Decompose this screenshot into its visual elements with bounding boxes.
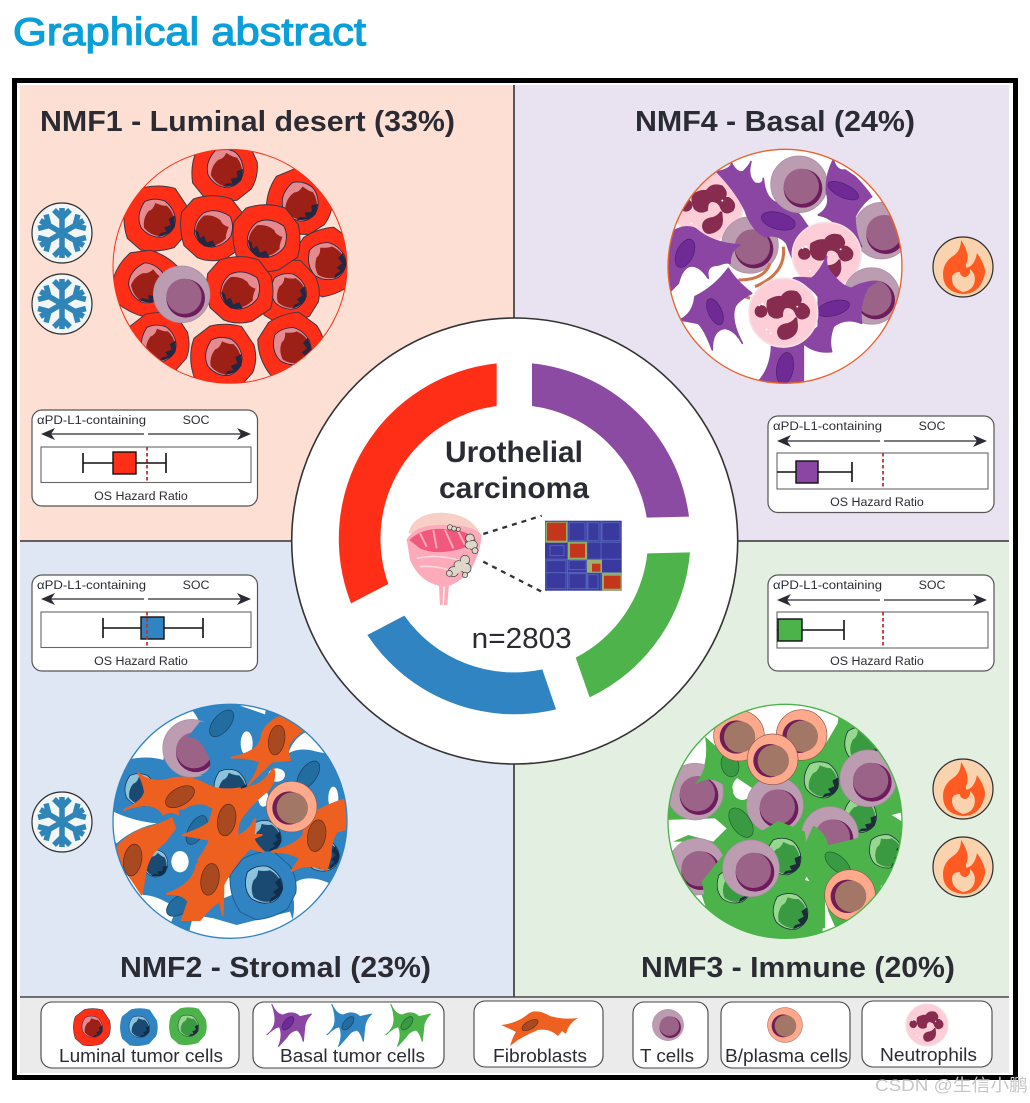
tumor microenvironment circle: NMF4 [668, 149, 910, 386]
title: Graphical abstract [13, 11, 366, 54]
panel: NMF4 background [514, 85, 1009, 541]
heading: NMF2: NMF2 - Stromal (23%) [120, 952, 431, 984]
forest plot: NMF4: SOC [919, 419, 945, 433]
icon: bladder [407, 513, 482, 605]
forest plot: NMF1: OS Hazard Ratio [94, 489, 188, 503]
icon: flame NMF3 top [933, 759, 993, 819]
legend: B/plasma cells: B/plasma cells [725, 1045, 848, 1066]
ring segment: NMF3 green [576, 552, 690, 697]
icon: snowflake NMF2 [32, 792, 92, 852]
legend: basal tumor cells [253, 1002, 444, 1068]
dotted lines to heatmap [483, 516, 542, 592]
legend: basal tumor cells: Basal tumor cells [280, 1045, 425, 1066]
panel: NMF1 background [20, 85, 514, 541]
panel: NMF2 background [20, 541, 514, 997]
icon: flame NMF3 bottom [933, 837, 993, 897]
forest plot: NMF3: SOC [919, 578, 945, 592]
heatmap [545, 521, 622, 591]
forest plot: NMF4 [768, 416, 994, 512]
tumor microenvironment circle: NMF2 [107, 704, 353, 942]
panel: NMF3 background [514, 541, 1009, 997]
icon: flame NMF4 [933, 237, 993, 297]
forest plot: NMF1: SOC [183, 413, 209, 427]
legend: neutrophils: Neutrophils [880, 1044, 977, 1065]
legend band background [20, 998, 1009, 1073]
sample size: n=2803 [472, 623, 572, 655]
tumor microenvironment circle: NMF1 [102, 131, 368, 389]
legend: luminal tumor cells: Luminal tumor cells [59, 1045, 223, 1066]
icon: snowflake NMF1 top [32, 203, 92, 263]
forest plot: NMF2: SOC [183, 578, 209, 592]
forest plot: NMF1: αPD-L1-containing [37, 413, 146, 427]
watermark: CSDN @生信小鹏 [875, 1076, 1028, 1095]
forest plot: NMF3: OS Hazard Ratio [830, 654, 924, 668]
centre heading: Urothelial [445, 436, 583, 469]
legend: luminal tumor cells [41, 1002, 239, 1068]
icon: snowflake NMF1 bottom [32, 274, 92, 334]
heading: NMF3: NMF3 - Immune (20%) [641, 952, 955, 984]
legend: fibroblasts: Fibroblasts [493, 1045, 587, 1066]
ring segment: NMF4 purple [532, 363, 689, 518]
forest plot: NMF3 [768, 575, 994, 671]
heading: NMF1: NMF1 - Luminal desert (33%) [40, 106, 455, 138]
heading: NMF4: NMF4 - Basal (24%) [635, 106, 915, 138]
ring segment: NMF2 blue [367, 616, 556, 714]
forest plot: NMF1 [32, 410, 258, 506]
legend: fibroblasts [474, 1001, 603, 1067]
centre circle [292, 318, 738, 764]
forest plot: NMF4: OS Hazard Ratio [830, 495, 924, 509]
forest plot: NMF3: αPD-L1-containing [773, 578, 882, 592]
forest plot: NMF2: αPD-L1-containing [37, 578, 146, 592]
legend: neutrophils [862, 1001, 992, 1067]
tumor microenvironment circle: NMF3 [667, 704, 903, 939]
centre heading line 2: carcinoma [439, 472, 589, 505]
legend: B/plasma cells [721, 1002, 850, 1068]
forest plot: NMF2: OS Hazard Ratio [94, 654, 188, 668]
legend: T cells: T cells [640, 1045, 694, 1066]
forest plot: NMF2 [32, 575, 258, 671]
legend: T cells [633, 1002, 708, 1068]
ring segment: NMF1 red [339, 363, 497, 603]
forest plot: NMF4: αPD-L1-containing [773, 419, 882, 433]
